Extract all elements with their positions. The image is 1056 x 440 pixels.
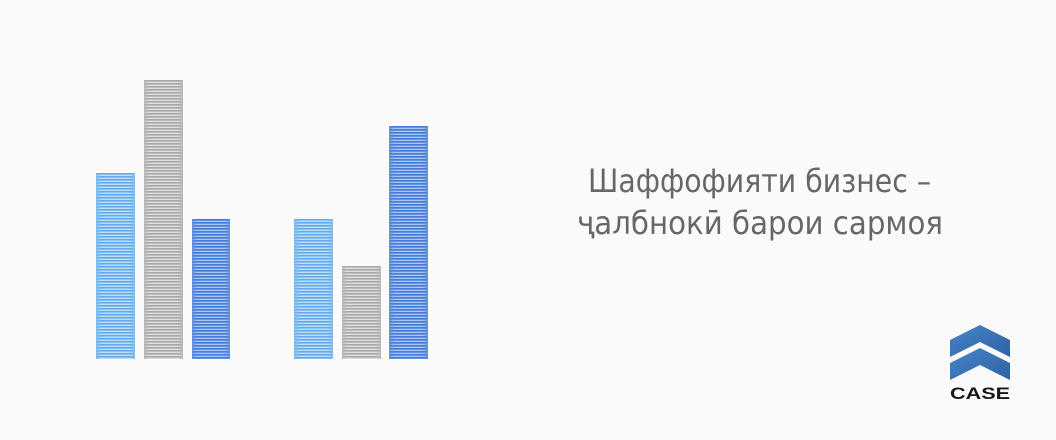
bar chart: left group <box>96 80 230 359</box>
bar: left group dark blue <box>192 219 230 359</box>
bar: left group light blue <box>96 173 135 359</box>
logo upper chevron <box>950 325 1010 357</box>
logo lower chevron <box>950 348 1010 380</box>
bar: right group light blue <box>294 219 333 359</box>
icon: CASE logo <box>950 325 1010 403</box>
bar: right group dark blue <box>389 126 428 359</box>
title line 1: Шаффофияти бизнес – <box>588 162 931 200</box>
title <box>577 162 943 242</box>
bar chart: right group <box>294 126 428 359</box>
bar: right group gray <box>342 266 381 359</box>
title line 2: ҷалбнокӣ барои сармоя <box>577 204 943 242</box>
logo wordmark: CASE <box>950 384 1010 403</box>
bar: left group gray <box>144 80 183 359</box>
